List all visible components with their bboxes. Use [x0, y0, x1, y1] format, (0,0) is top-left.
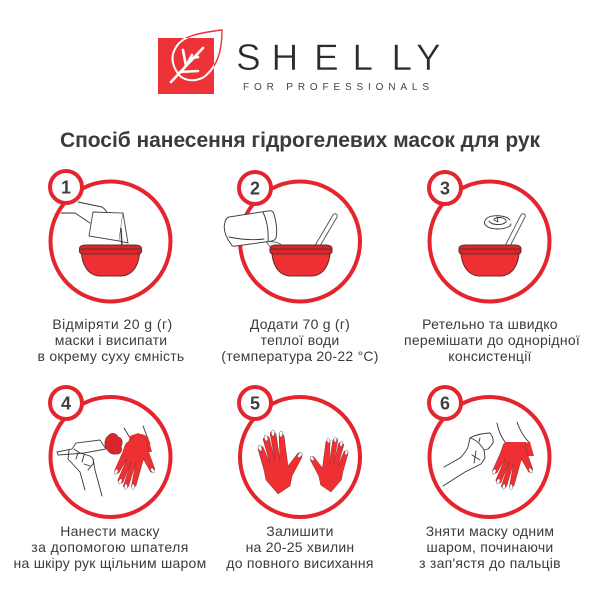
step 2 caption: Додати 70 g (г)	[250, 316, 350, 332]
step 6 number badge: 6	[440, 394, 450, 414]
step 3 caption	[404, 316, 580, 364]
step 5 caption	[226, 523, 374, 571]
step 1 illustration: hand pouring packet into bowl	[61, 202, 142, 276]
step 2 caption: (температура 20-22 °C)	[221, 348, 379, 364]
step 1 caption: в окрему суху ємність	[38, 348, 184, 364]
brand tagline: FOR PROFESSIONALS	[243, 82, 429, 93]
step 4 caption: на шкіру рук щільним шаром	[14, 555, 206, 571]
step 4 caption: за допомогою шпателя	[31, 539, 189, 555]
step 3 illustration: mixing in bowl	[459, 216, 523, 276]
step 5 number badge: 5	[250, 394, 260, 414]
step 6 caption: з зап'ястя до пальців	[419, 555, 561, 571]
step 3 caption: консистенції	[448, 348, 532, 364]
step 3 number badge: 3	[440, 178, 450, 198]
step 6 circle	[430, 397, 550, 517]
title: Спосіб нанесення гідрогелевих масок для рук	[60, 129, 540, 152]
step 6 number badge	[429, 387, 461, 419]
brand name: SHELLY	[236, 37, 441, 78]
step 2	[221, 172, 379, 364]
step 4 number badge: 4	[61, 394, 71, 414]
step 1 circle	[50, 182, 170, 302]
step 5 illustration: two coated hands	[257, 430, 349, 494]
step 5 caption: до повного висихання	[226, 555, 374, 571]
step 1 number badge: 1	[61, 178, 71, 198]
step 3 caption: перемішати до однорідної	[404, 332, 580, 348]
step 3 number badge	[429, 172, 461, 204]
step 5 caption: Залишити	[266, 523, 334, 539]
step 1	[38, 171, 184, 364]
step 6	[419, 387, 561, 571]
step 5 number badge	[239, 387, 271, 419]
step 4 number badge	[50, 387, 82, 419]
step 2 caption	[221, 316, 379, 364]
step 4 caption: Нанести маску	[60, 523, 160, 539]
step 1 caption: маски і висипати	[55, 332, 167, 348]
step 5 circle	[240, 397, 360, 517]
step 1 number badge	[50, 171, 82, 203]
step 6 caption	[419, 523, 561, 571]
step 6 caption: Зняти маску одним	[426, 523, 554, 539]
step 6 caption: шаром, починаючи	[426, 539, 554, 555]
step 2 caption: теплої води	[260, 332, 340, 348]
step 3 circle	[430, 182, 550, 302]
logo icon: red square with leaf	[158, 30, 222, 94]
step 3 caption: Ретельно та швидко	[422, 316, 558, 332]
step 4 circle	[50, 397, 170, 517]
step 2 number badge	[239, 172, 271, 204]
step 6 illustration: peeling mask off hand	[443, 422, 538, 493]
step 4 illustration: brush applying mask to hand	[57, 426, 160, 496]
step 3	[404, 172, 580, 364]
step 2 illustration: glass pouring water into bowl	[224, 211, 335, 276]
step 1 caption: Відміряти 20 g (г)	[52, 316, 173, 332]
step 5	[226, 387, 374, 571]
step 1 caption	[38, 316, 184, 364]
step 2 circle	[240, 182, 360, 302]
logo	[158, 30, 441, 94]
step 2 number badge: 2	[250, 178, 260, 198]
step 5 caption: на 20-25 хвилин	[246, 539, 354, 555]
step 4 caption	[14, 523, 206, 571]
step 4	[14, 387, 206, 571]
